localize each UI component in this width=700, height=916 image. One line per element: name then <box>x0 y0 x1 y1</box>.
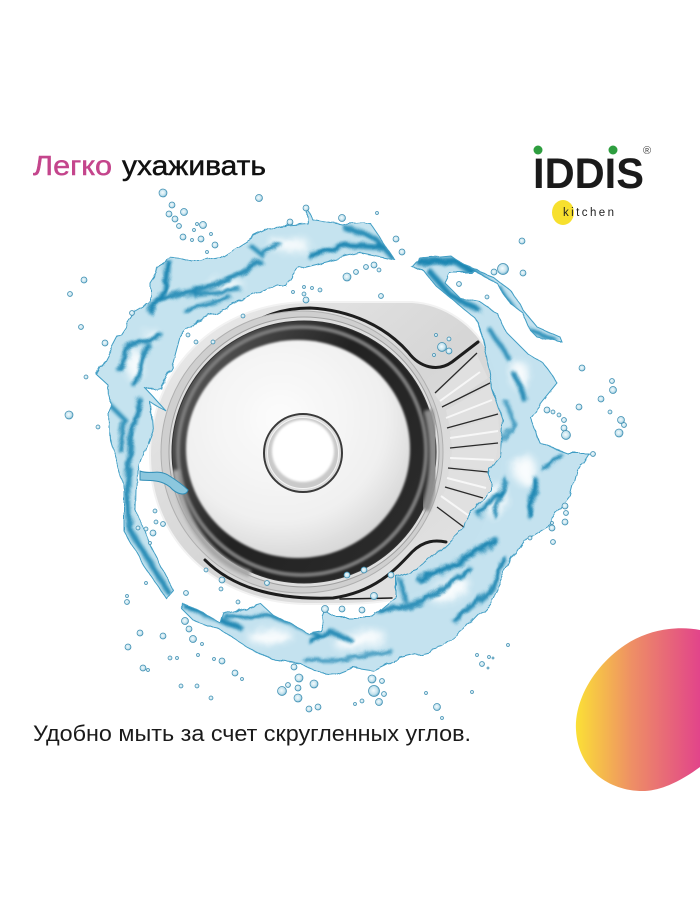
drainer ribs <box>435 353 500 528</box>
logo yellow spot <box>552 200 574 225</box>
water droplets <box>65 189 626 720</box>
title: Легко ухаживать <box>33 150 266 181</box>
bowl dark wall <box>172 321 436 583</box>
gradient blob <box>576 628 700 791</box>
logo: IDDIS kitchen <box>533 145 651 225</box>
dark swoosh edges <box>205 308 478 599</box>
bowl outer rim <box>161 311 443 593</box>
infographic canvas <box>33 146 700 791</box>
logo kitchen: kitchen <box>563 207 614 219</box>
logo green dots <box>534 146 618 154</box>
water tendril over sink <box>140 471 188 494</box>
drain <box>264 414 342 492</box>
title: Легко ухаживать: Легко <box>33 150 112 181</box>
title: Легко ухаживать: ухаживать <box>122 150 266 181</box>
logo wordmark: IDDIS <box>533 150 644 198</box>
registered mark: ® <box>643 145 651 157</box>
bowl floor <box>186 340 410 558</box>
water splash: bottom and right <box>170 250 600 680</box>
sink <box>150 302 505 604</box>
water splash: top left <box>90 200 410 600</box>
caption: Удобно мыть за счет скругленных углов. <box>33 721 471 746</box>
sink plate <box>150 302 505 604</box>
